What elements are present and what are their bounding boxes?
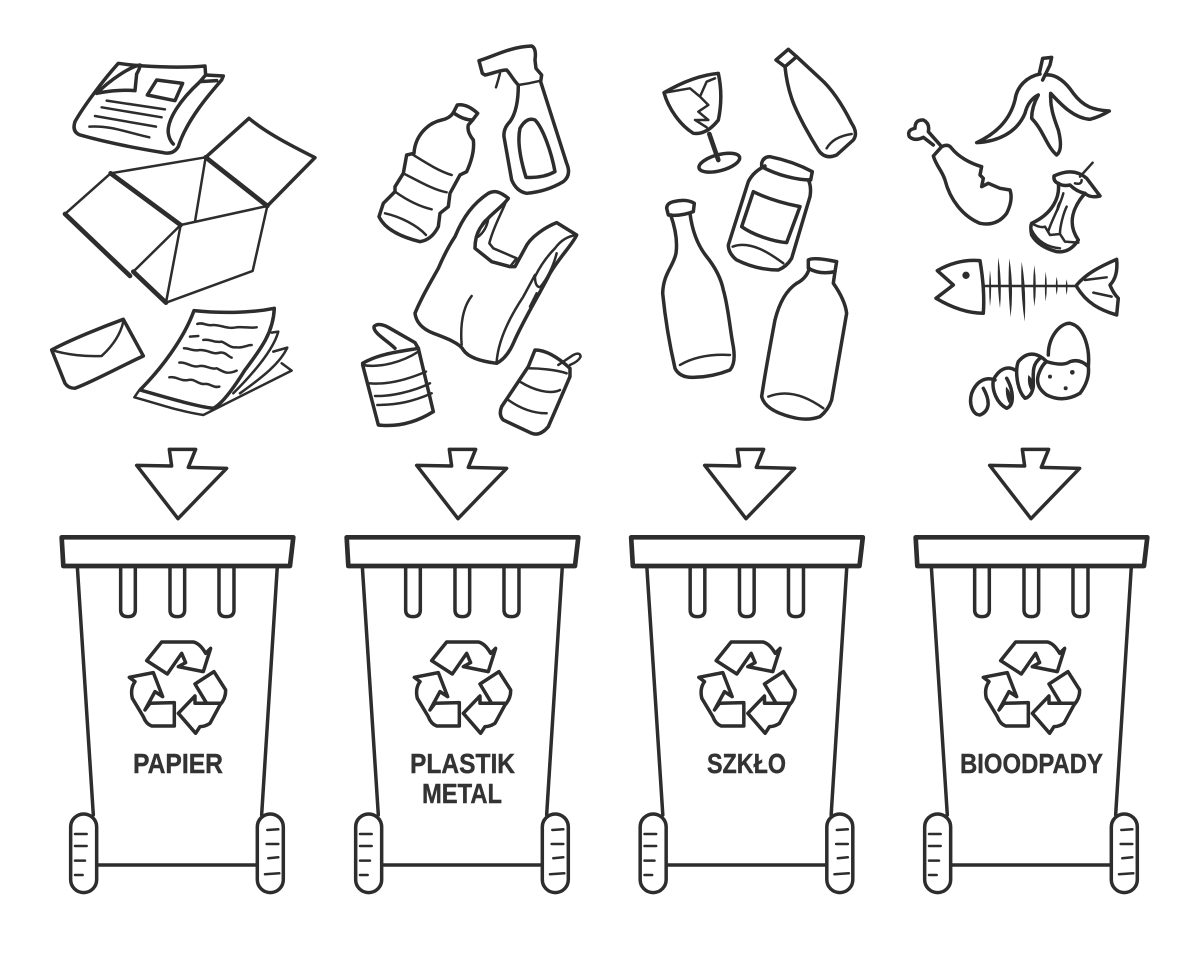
arrow: into plastik metal bin <box>417 449 507 519</box>
arrow: into bioodpady bin <box>990 449 1080 519</box>
icon: drink can <box>500 350 581 434</box>
column: papier <box>52 63 315 893</box>
icon: sheets of paper <box>134 308 292 415</box>
label: papier: PAPIER <box>133 748 223 779</box>
arrow: into szklo bin <box>705 449 795 519</box>
icon: glass jar <box>728 157 812 270</box>
icon: envelope <box>52 319 143 388</box>
label: plastik: PLASTIK <box>410 748 515 779</box>
icon: chicken drumstick <box>909 120 1011 224</box>
icon: plastic bag <box>415 192 577 363</box>
label: metal: METAL <box>422 778 502 809</box>
icon: tall glass bottle <box>663 200 734 377</box>
icon: broken wine glass <box>664 73 742 176</box>
icon: fish skeleton <box>936 257 1118 322</box>
arrow: into papier bin <box>137 449 227 519</box>
label: szklo: SZKŁO <box>707 748 786 779</box>
icon: apple core <box>1031 163 1100 252</box>
bin: bioodpady <box>916 537 1147 893</box>
icon: spray bottle <box>479 46 569 193</box>
icon: cardboard box <box>65 118 315 303</box>
icon: plastic bottle <box>379 105 478 242</box>
column: bioodpady <box>909 57 1147 893</box>
label: bioodpady: BIOODPADY <box>960 748 1103 779</box>
column: plastik metal <box>347 46 581 893</box>
bin: szklo <box>631 537 863 893</box>
icon: newspaper <box>74 63 223 153</box>
bin: papier <box>62 537 293 893</box>
icon: open tin can <box>363 324 433 426</box>
icon: small glass bottle <box>776 49 855 157</box>
column: szklo <box>631 49 863 893</box>
bin: plastik metal <box>347 537 578 893</box>
icon: banana peel <box>977 57 1109 155</box>
icon: wide glass bottle <box>762 259 847 419</box>
icon: potato and peel <box>971 323 1089 415</box>
